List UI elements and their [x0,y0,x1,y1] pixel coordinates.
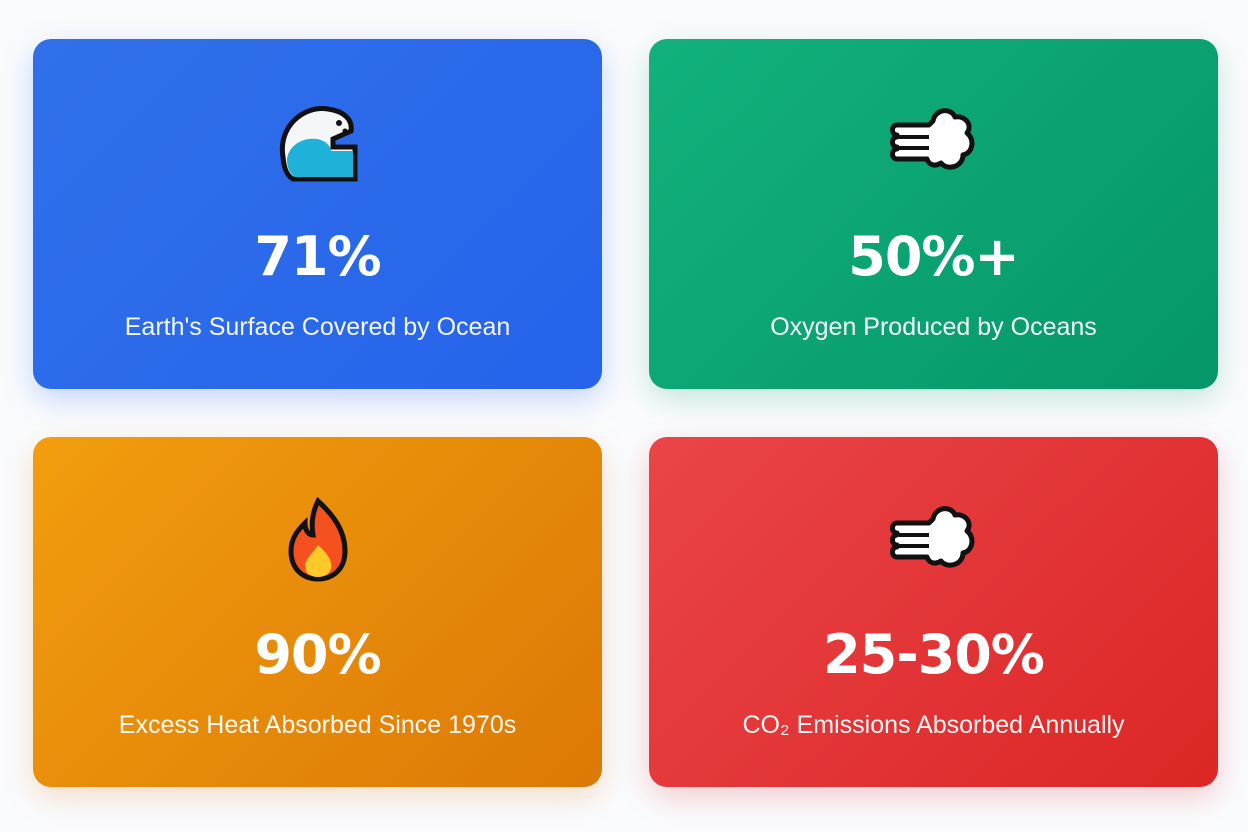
icon: wave [280,106,358,182]
card: oxygen [649,39,1218,389]
label: CO₂ Emissions Absorbed Annually [742,711,1125,739]
card: CO2 [649,437,1218,787]
icon: fire [288,496,348,582]
stat number: 25-30% [823,623,1044,686]
label: Earth's Surface Covered by Ocean [125,313,510,341]
card: ocean coverage [33,39,602,389]
card: heat [33,437,602,787]
icon: wind puff [890,108,974,170]
label: Excess Heat Absorbed Since 1970s [119,711,516,739]
label: Oxygen Produced by Oceans [770,313,1097,341]
icon: wind puff [890,506,974,568]
stat number: 71% [254,225,381,288]
stat number: 50%+ [848,225,1019,288]
stat number: 90% [254,623,381,686]
